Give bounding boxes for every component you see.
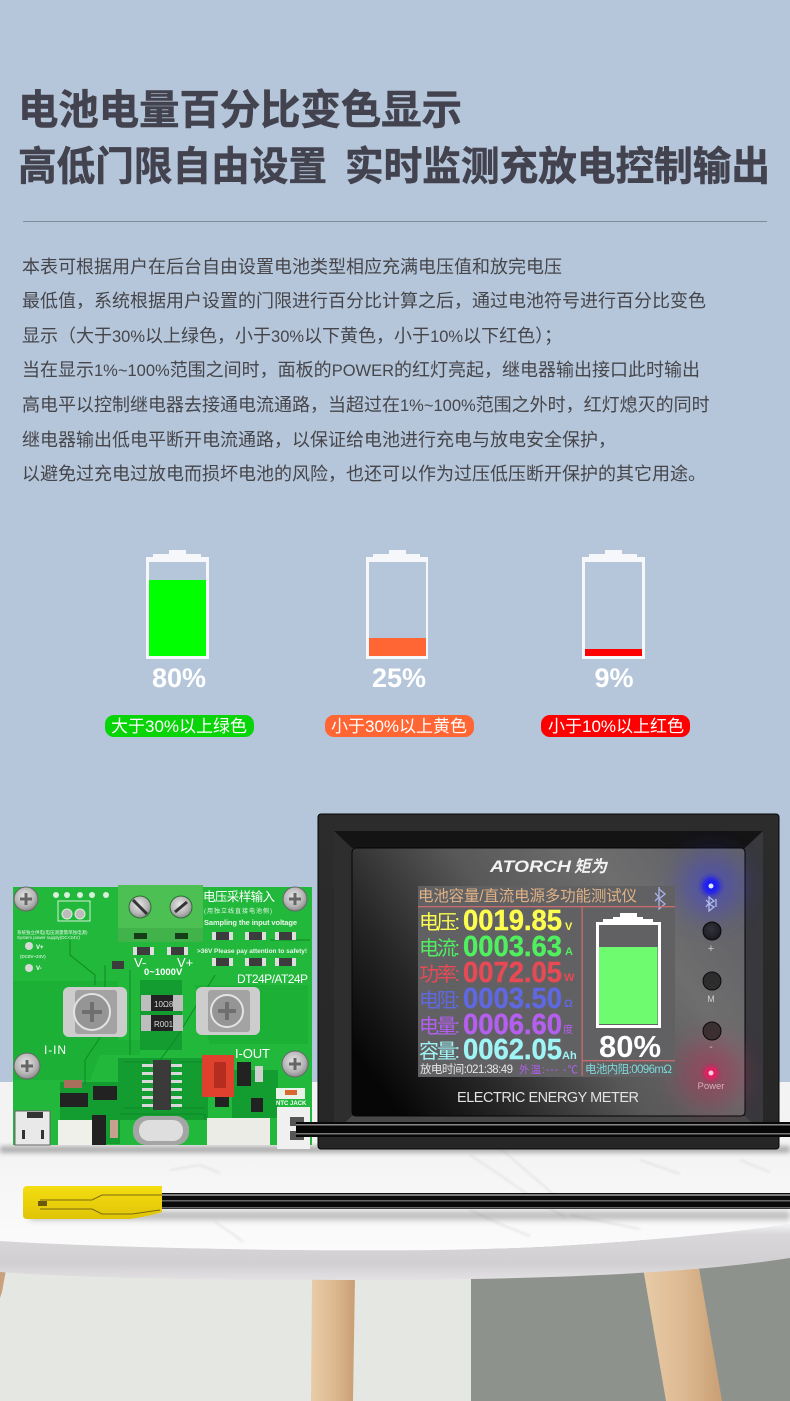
board labels: >36V Please pay attention to safety! [197, 948, 307, 955]
red connector [202, 1055, 234, 1097]
value 80%: 80% [152, 663, 206, 693]
status: external temperature: 外温:--- -℃ [519, 1064, 578, 1076]
reading: capacity [419, 1034, 577, 1066]
floor left [0, 1240, 472, 1401]
description text block: 高电平以控制继电器去接通电流通路，当超过在1%~100%范围之外时，红灯熄灭的同时 [22, 395, 710, 415]
board labels: V- [36, 966, 42, 972]
description text block [22, 257, 710, 484]
icon: battery 80% [146, 550, 209, 659]
table leg center [311, 1275, 355, 1401]
button minus [703, 1022, 721, 1040]
shunt resistors: 10Ω8 [154, 1000, 174, 1009]
reading: capacity: Ah [562, 1050, 577, 1062]
circuit board [13, 885, 312, 1149]
footprint dots [53, 892, 109, 898]
NTC footprint outline [58, 901, 90, 921]
reading: power [419, 957, 575, 989]
divider resistors [112, 932, 296, 969]
reading: current [419, 931, 573, 963]
icon: battery 25% [366, 550, 428, 659]
battery status: 9% red [541, 550, 690, 737]
reading: energy: 0006.60 [463, 1009, 562, 1041]
description text block: 显示（大于30%以上绿色，小于30%以下黄色，小于10%以下红色）； [22, 326, 562, 346]
title [18, 87, 770, 189]
cable shadow [30, 1211, 790, 1220]
connector: power JST [58, 1120, 92, 1145]
title line 2: 实时监测充放电控制输出 [345, 145, 770, 189]
brand logo: 矩为 [574, 858, 608, 876]
description text block: 当在显示1%~100%范围之间时，面板的POWER的红灯亮起，继电器输出接口此时输出 [22, 360, 700, 380]
side controls [698, 884, 724, 1092]
wall [0, 1082, 790, 1152]
reading: resistance [419, 983, 573, 1015]
crystal [133, 1116, 189, 1145]
reading: resistance: 电阻: [419, 989, 460, 1012]
red LED [708, 1070, 714, 1076]
LCD bluetooth icon [655, 887, 665, 909]
board labels: 电压采样输入 [203, 889, 275, 904]
battery status: 80% green [105, 550, 254, 737]
battery status: 25% orange [325, 550, 474, 737]
board labels: NTC JACK [276, 1101, 307, 1107]
board labels: System power supply(DC<24V) [17, 935, 80, 940]
board labels: DT24P/AT24P [237, 972, 308, 986]
glow: red LED [679, 1041, 743, 1105]
board PCB [13, 887, 312, 1145]
board screws [14, 887, 308, 1079]
icon: LCD battery [596, 913, 661, 1028]
power label: Power [698, 1081, 724, 1092]
table leg left [0, 1270, 6, 1298]
connector: NTC socket [276, 1088, 310, 1149]
legend pill: green: 大于30%以上绿色 [111, 717, 247, 736]
reading: current: 电流: [419, 937, 460, 960]
reading: resistance: 0003.50 [463, 983, 562, 1015]
board labels: (DC8V~24V) [20, 954, 46, 959]
meter cable [296, 1122, 790, 1137]
value 25%: 25% [372, 663, 426, 693]
side controls: - [709, 1042, 713, 1053]
value 9%: 9% [594, 663, 634, 693]
description text block: 以避免过充电过放电而损坏电池的风险，也还可以作为过压低压断开保护的其它用途。 [22, 464, 706, 484]
title line 2 [18, 145, 770, 189]
current terminal I-OUT [196, 987, 260, 1035]
connector: 5-pin [207, 1118, 270, 1145]
description text block: 继电器输出低电平断开电流通路，以保证给电池进行充电与放电安全保护， [22, 430, 616, 450]
reading: current: 0003.63 [463, 931, 562, 963]
reading: voltage: V [565, 921, 573, 933]
reading: voltage [419, 905, 573, 937]
shunt resistors: R001 [154, 1020, 174, 1029]
reading: power: W [564, 972, 575, 984]
board labels: (用独立线直接电池侧) [204, 907, 272, 915]
brand logo [489, 857, 608, 876]
floor right [471, 1240, 790, 1401]
reading: voltage: 电压: [419, 911, 460, 934]
table rim [0, 1224, 790, 1280]
board labels: 0~1000V [144, 967, 183, 978]
blue LED [708, 884, 714, 888]
button plus [703, 922, 721, 940]
reading: capacity: 0062.05 [463, 1034, 562, 1066]
meter bevel frame [334, 831, 763, 1133]
description text block: 最低值，系统根据用户设置的门限进行百分比计算之后，通过电池符号进行百分比变色 [22, 291, 706, 311]
LCD title: 电池容量/直流电源多功能测试仪 [418, 887, 637, 905]
title line 1: 电池电量百分比变色显示 [18, 87, 462, 133]
current terminal I-IN [63, 987, 127, 1037]
meter caption: ELECTRIC ENERGY METER [457, 1090, 639, 1106]
probe cable [162, 1193, 790, 1209]
legend pill: red: 小于10%以上红色 [548, 717, 684, 736]
glow: blue LED [681, 856, 741, 916]
table leg right [642, 1262, 722, 1401]
reading: power: 功率: [419, 963, 460, 986]
LCD background [418, 886, 675, 1077]
reading: current: A [565, 946, 573, 958]
board labels: V+ [36, 945, 44, 951]
board labels: I-OUT [235, 1046, 270, 1061]
reading: power: 0072.05 [463, 957, 562, 989]
icon: yellow NTC probe [23, 1186, 162, 1219]
LCD screen [418, 886, 675, 1077]
energy meter device [296, 814, 790, 1149]
reading: energy: 度 [563, 1023, 573, 1036]
button M [703, 972, 721, 990]
title line 2: 高低门限自由设置 [18, 145, 327, 189]
connector: USB [15, 1111, 50, 1145]
reading: resistance: Ω [564, 998, 573, 1010]
green screw terminal [118, 885, 203, 942]
board labels: 系统独立供电(电压测量需单独电源) [17, 929, 88, 936]
brand logo: ATORCH [489, 857, 572, 876]
board labels: V+ [177, 955, 193, 970]
icon: battery 9% [582, 550, 645, 659]
reading: capacity: 容量: [419, 1040, 460, 1063]
status: discharge time: 放电时间:021:38:49 [420, 1062, 513, 1076]
side controls: + [708, 943, 714, 955]
IC chip [142, 1060, 182, 1110]
board labels: V- [134, 955, 146, 970]
reading: energy [419, 1009, 573, 1041]
LCD value 80%: 80% [599, 1029, 661, 1064]
meter case [318, 814, 779, 1149]
board labels [17, 889, 308, 1107]
reading: voltage: 0019.85 [463, 905, 562, 937]
table scene [0, 1082, 790, 1401]
board labels: I-IN [44, 1043, 66, 1057]
status: internal resistance: 电池内阻:0096mΩ [585, 1062, 672, 1076]
table top [0, 1145, 790, 1250]
board labels: Sampling the input voltage [204, 918, 297, 927]
meter face [352, 848, 745, 1116]
legend pill: orange: 小于30%以上黄色 [331, 717, 467, 736]
description text block: 本表可根据用户在后台自由设置电池类型相应充满电压值和放完电压 [22, 257, 562, 277]
small SMD parts [60, 1062, 263, 1145]
side controls: M [707, 994, 715, 1004]
shunt resistors [141, 995, 183, 1031]
temperature probe with cable [23, 1186, 790, 1220]
bluetooth symbol [706, 897, 716, 911]
reading: energy: 电量: [419, 1015, 460, 1038]
